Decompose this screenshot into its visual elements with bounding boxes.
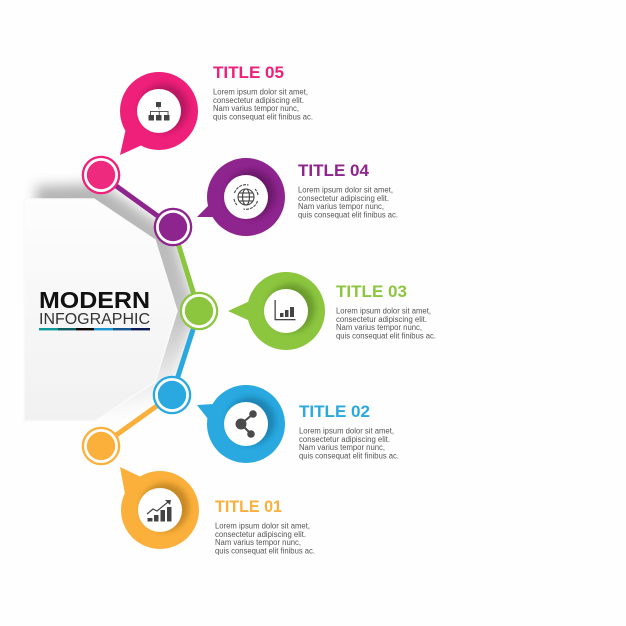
bubble: title 02 [197,385,285,463]
text block: title 05: Nam varius tempor nunc, [213,104,299,113]
text block: title 05: quis consequat elit finibus ac. [213,112,313,122]
heading underline [39,328,150,330]
icon: org chart [148,102,170,120]
heading: infographic: INFOGRAPHIC [39,311,150,328]
text block: title 01: Lorem ipsum dolor sit amet, [215,522,310,530]
node: purple [154,208,192,246]
node: pink [82,156,120,194]
panel: modern infographic [24,199,177,421]
node: blue [153,376,191,414]
node: green [180,292,218,330]
text block: title 01: quis consequat elit finibus ac. [215,546,315,556]
text block: title 01: Nam varius tempor nunc, [215,538,301,547]
connector: purple to green [173,227,199,311]
text block: title 03 [336,282,436,340]
connector: pink to purple [101,175,173,227]
text block: title 01: consectetur adipiscing elit. [215,530,306,539]
text block: title 03: consectetur adipiscing elit. [336,315,427,324]
text block: title 01: TITLE 01 [215,497,282,516]
text block: title 03: TITLE 03 [336,282,407,301]
text block: title 04: quis consequat elit finibus ac. [298,210,398,220]
text block: title 03: Lorem ipsum dolor sit amet, [336,306,431,316]
text block: title 04: Lorem ipsum dolor sit amet, [298,186,393,194]
text block: title 04: Nam varius tempor nunc, [298,202,384,211]
text block: title 05: Lorem ipsum dolor sit amet, [213,88,308,96]
panel shadow [36,184,196,424]
bubble: title 01 [120,467,199,549]
heading: modern: MODERN [39,287,150,313]
connector: green to blue [172,311,199,395]
text block: title 02: quis consequat elit finibus ac. [299,452,399,460]
text block: title 02: Lorem ipsum dolor sit amet, [299,426,394,436]
text block: title 05: TITLE 05 [213,63,284,82]
bubble: title 04 [197,158,285,236]
bubble: title 03 [228,272,325,350]
text block: title 03: Nam varius tempor nunc, [336,323,422,332]
icon: bar chart [274,300,296,320]
text block: title 04: consectetur adipiscing elit. [298,194,389,203]
text block: title 02: TITLE 02 [299,402,370,421]
connector: blue to orange [101,395,172,446]
text block: title 02: Nam varius tempor nunc, [299,443,385,452]
bubble: title 05 [120,72,198,155]
text block: title 04: TITLE 04 [298,161,370,180]
node: orange [82,427,120,465]
text block: title 03: quis consequat elit finibus ac. [336,332,436,340]
text block: title 02: consectetur adipiscing elit. [299,435,390,444]
text block: title 05 [213,63,313,122]
icon: growth chart [147,500,172,522]
text block: title 02 [299,402,399,460]
text block: title 04 [298,161,398,220]
text block: title 05: consectetur adipiscing elit. [213,96,304,105]
text block: title 01 [215,497,315,556]
icon: globe with arrows [234,185,258,209]
icon: share [236,410,257,438]
